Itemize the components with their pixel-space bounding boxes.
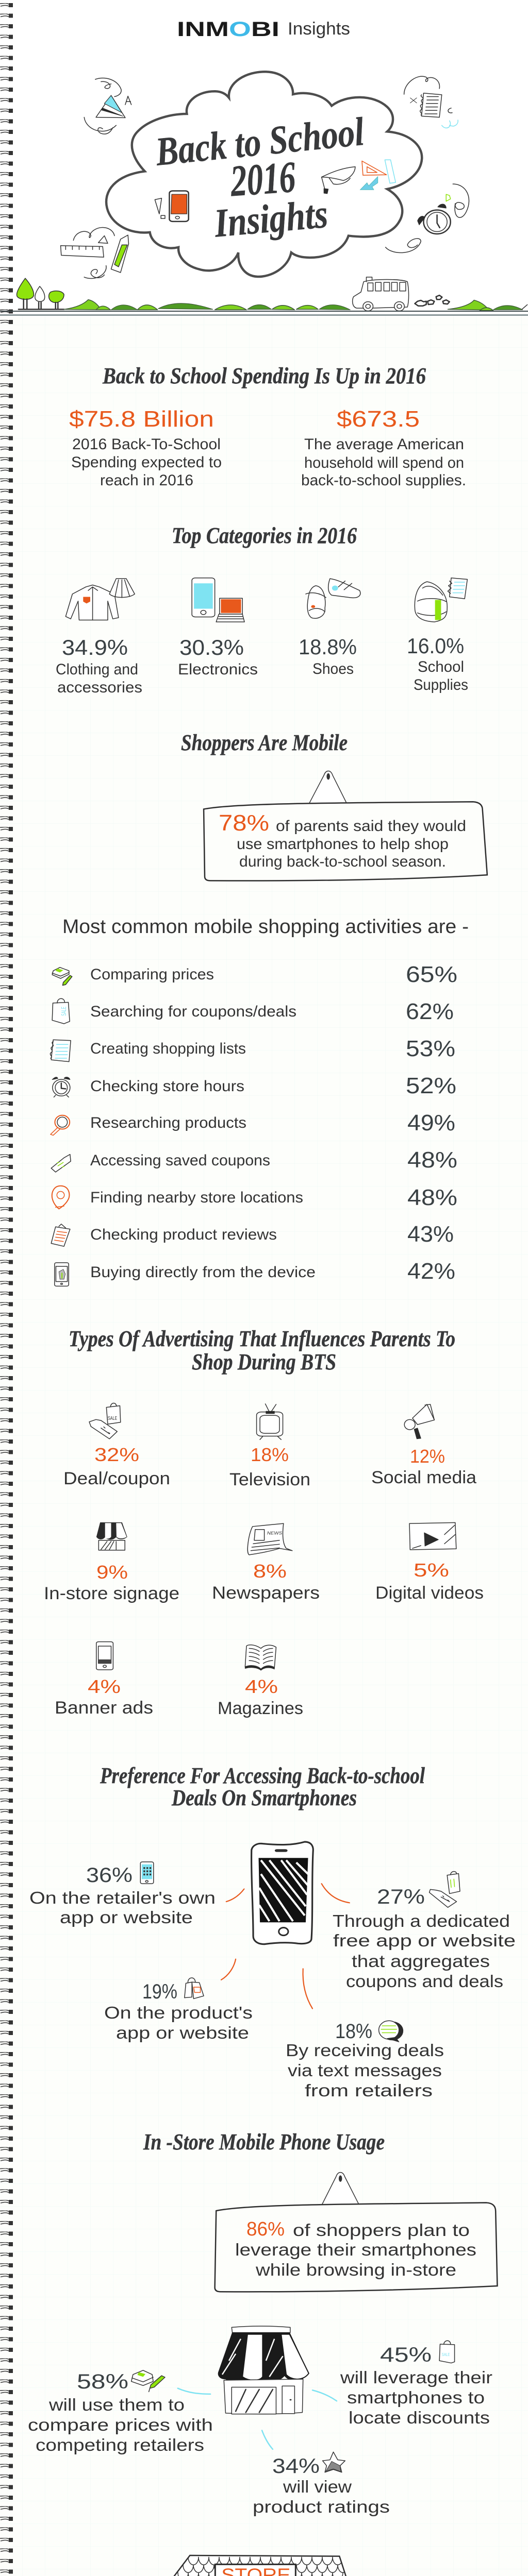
- ad item: digital videos: Digital videos: [375, 1583, 484, 1603]
- ad item: in-store signage: In-store signage: [44, 1584, 179, 1603]
- category labels: Supplies: [414, 676, 468, 693]
- stat: 58 percent: competing retailers: [36, 2435, 204, 2454]
- icon: notebook doodle: [404, 76, 458, 128]
- stat: 58 percent: compare prices with: [28, 2415, 213, 2434]
- ad item: deal coupon: 32%: [94, 1444, 139, 1465]
- icon: shoes: [306, 579, 360, 618]
- ad item: digital videos: [375, 1522, 484, 1603]
- ad item: newspapers: Newspapers: [212, 1583, 320, 1603]
- stat: 75.8 billion: reach in 2016: [100, 472, 193, 489]
- row: saved coupons: [51, 1147, 457, 1173]
- ad item: magazines: [218, 1645, 303, 1718]
- callout: 78 percent: 78%: [219, 810, 269, 836]
- stat: 45 percent: smartphones to: [347, 2388, 485, 2407]
- title: [153, 109, 366, 246]
- ad item: social media: [371, 1404, 476, 1487]
- heading: [100, 1763, 425, 1810]
- bushes: [64, 300, 527, 311]
- ad item: in-store signage: 9%: [96, 1562, 128, 1583]
- section: advertising types: [44, 1326, 484, 1718]
- icon: paper plane: [84, 78, 131, 134]
- row: saved coupons: Accessing saved coupons: [90, 1152, 270, 1169]
- stat: 34 percent: product ratings: [253, 2497, 390, 2516]
- row: store locations: [52, 1185, 457, 1210]
- ad item: newspapers: NEWS: [267, 1531, 282, 1536]
- ad item: deal coupon: [63, 1403, 170, 1488]
- callout: 78 percent: of parents said they would: [276, 818, 466, 835]
- icon: large smartphone with arrows: [221, 1842, 350, 2009]
- row: buying directly: Buying directly from the device: [90, 1264, 316, 1281]
- roof: [171, 2555, 349, 2576]
- row: store hours: [52, 1073, 456, 1098]
- logo: InMobi Insights: Insights: [288, 19, 350, 39]
- category labels: Shoes: [312, 660, 354, 677]
- row: buying directly: 42%: [407, 1259, 455, 1284]
- stat: 36 percent: 36%: [86, 1864, 133, 1887]
- row: creating lists: 53%: [406, 1036, 455, 1061]
- row: creating lists: [50, 1036, 455, 1062]
- callout: 86 percent: [215, 2173, 497, 2292]
- logo: InMobi Insights: INM O BI: [177, 18, 279, 41]
- stat: 27 percent: [333, 1871, 516, 1991]
- row: product reviews: 43%: [407, 1222, 454, 1247]
- row: buying directly: [55, 1259, 455, 1286]
- stat: 75.8 billion: Spending expected to: [71, 454, 222, 471]
- ad item: television: 18%: [251, 1444, 289, 1465]
- subheading: Most common mobile shopping activities are -: [62, 916, 469, 938]
- ad item: newspapers: 8%: [253, 1561, 287, 1582]
- ground lines: [0, 311, 528, 312]
- row: comparing prices: Comparing prices: [90, 966, 214, 983]
- category values: 16.0%: [407, 634, 464, 658]
- section: preference for deals: [29, 1763, 516, 2100]
- stat: 45 percent: locate discounts: [349, 2408, 490, 2427]
- heading: Shoppers Are Mobile: [181, 730, 348, 755]
- stat: 75.8 billion: [69, 406, 222, 489]
- heading: Preference For Accessing Back-to-school: [100, 1763, 425, 1788]
- category labels: Clothing and: [56, 661, 138, 678]
- stat: 58 percent: [28, 2370, 213, 2454]
- icon: backpack and notebook: [415, 578, 467, 622]
- heading: Types Of Advertising That Influences Parents To: [69, 1326, 455, 1351]
- stat: 673.5: household will spend on: [304, 454, 464, 471]
- section: top categories: [56, 523, 468, 696]
- row: comparing prices: 65%: [406, 962, 457, 987]
- callout: 78 percent: use smartphones to help shop: [237, 836, 449, 853]
- row: store locations: 48%: [407, 1185, 457, 1210]
- section: shoppers are mobile: [50, 730, 487, 1286]
- title: Insights: [212, 191, 329, 246]
- row: researching products: 49%: [407, 1110, 455, 1136]
- row: saved coupons: 48%: [407, 1147, 457, 1173]
- category labels: School: [418, 658, 464, 675]
- callout: 86 percent: 86%: [246, 2218, 285, 2240]
- row: store locations: Finding nearby store locations: [90, 1189, 303, 1206]
- row: searching for coupons: 62%: [406, 999, 454, 1024]
- icon: set square and ruler: [360, 160, 395, 190]
- ad item: deal coupon: SALE: [108, 1415, 117, 1421]
- icon: graduation cap: [322, 167, 355, 194]
- stat: 58 percent: will use them to: [48, 2395, 185, 2414]
- row: product reviews: [51, 1222, 454, 1247]
- row: store hours: Checking store hours: [90, 1078, 244, 1095]
- stat: 75.8 billion: $75.8 Billion: [69, 406, 214, 432]
- title: Back to School: [153, 109, 366, 174]
- stat: 673.5: $673.5: [337, 406, 420, 432]
- row: searching for coupons: SALE: [60, 1007, 68, 1016]
- stat: 27 percent: coupons and deals: [346, 1972, 503, 1991]
- spiral binding: [0, 0, 13, 2576]
- category icons: [65, 578, 467, 622]
- stat: 19 percent: [104, 1978, 253, 2042]
- ad item: social media: Social media: [371, 1468, 476, 1487]
- header cloud with title: [106, 72, 422, 277]
- stat: 673.5: The average American: [304, 436, 464, 453]
- stat: 27 percent: free app or website: [333, 1931, 516, 1950]
- heading: Top Categories in 2016: [172, 523, 357, 548]
- ad item: deal coupon: Deal/coupon: [63, 1469, 170, 1488]
- stat: 75.8 billion: 2016 Back-To-School: [72, 436, 221, 453]
- callout: 86 percent: leverage their smartphones: [235, 2240, 476, 2259]
- icon: shirt and skirt: [65, 579, 135, 620]
- stat: 673.5: [301, 406, 466, 489]
- stat: 19 percent: app or website: [116, 2023, 249, 2042]
- heading: Shop During BTS: [192, 1349, 336, 1375]
- heading: [69, 1326, 455, 1375]
- logo: InMobi Insights: [177, 18, 350, 41]
- category labels: accessories: [57, 679, 142, 696]
- category labels: Electronics: [178, 661, 258, 678]
- row: searching for coupons: Searching for coupons/deals: [90, 1003, 296, 1020]
- ad item: television: Television: [229, 1470, 310, 1489]
- stat: 34 percent: 34%: [272, 2455, 320, 2478]
- icon: smartphone: [155, 191, 189, 222]
- list: mobile activities: [50, 962, 457, 1286]
- stat: 18 percent: via text messages: [288, 2061, 442, 2080]
- stat: 18 percent: from retailers: [305, 2081, 433, 2100]
- stat: 36 percent: [29, 1862, 216, 1927]
- stat: 18 percent: [286, 2020, 444, 2100]
- row: researching products: [51, 1110, 455, 1136]
- ad item: banner ads: [55, 1642, 153, 1718]
- category labels: [56, 658, 468, 696]
- ad item: banner ads: 4%: [88, 1676, 121, 1697]
- stat: 27 percent: Through a dedicated: [333, 1911, 510, 1930]
- callout: 78 percent: [204, 771, 487, 881]
- stat: 45 percent: will leverage their: [340, 2368, 492, 2387]
- icon: trees: [17, 278, 64, 309]
- heading: In -Store Mobile Phone Usage: [143, 2129, 385, 2155]
- category values: 30.3%: [179, 635, 244, 659]
- stat: 45 percent: 45%: [380, 2344, 432, 2366]
- title: 2016: [228, 152, 297, 206]
- icon: phone and laptop: [192, 578, 244, 622]
- category values: 34.9%: [62, 635, 128, 659]
- stat: 34 percent: will view: [283, 2477, 352, 2496]
- row: comparing prices: [52, 962, 457, 987]
- stat: 18 percent: 18%: [335, 2020, 372, 2043]
- store building: [171, 2555, 349, 2576]
- row: creating lists: Creating shopping lists: [90, 1040, 246, 1057]
- header doodles: [17, 76, 527, 311]
- ad item: television: [229, 1404, 310, 1489]
- stat: 27 percent: that aggregates: [352, 1952, 490, 1971]
- row: searching for coupons: [52, 998, 454, 1024]
- icon: school bus: [353, 277, 450, 311]
- stat: 45 percent: SALE: [442, 2353, 450, 2358]
- stat: 58 percent: 58%: [77, 2370, 128, 2393]
- ad item: magazines: Magazines: [218, 1699, 303, 1718]
- callout: 86 percent: while browsing in-store: [255, 2260, 456, 2279]
- row: store hours: 52%: [406, 1073, 456, 1098]
- row: product reviews: Checking product reviews: [90, 1226, 277, 1243]
- stat: 18 percent: By receiving deals: [286, 2041, 444, 2060]
- section: in-store mobile usage: [28, 2129, 497, 2516]
- stat: 673.5: back-to-school supplies.: [301, 472, 466, 489]
- ad item: banner ads: Banner ads: [55, 1698, 153, 1718]
- category values: 18.8%: [299, 635, 357, 659]
- stat: 19 percent: 19%: [142, 1980, 177, 2003]
- callout: 78 percent: during back-to-school season.: [239, 853, 446, 870]
- ad item: magazines: 4%: [245, 1676, 278, 1697]
- callout: 86 percent: of shoppers plan to: [293, 2221, 470, 2240]
- ad item: digital videos: 5%: [414, 1560, 449, 1581]
- ad item: social media: 12%: [410, 1446, 445, 1467]
- icon: large storefront with arrows: [178, 2326, 337, 2449]
- stat: 19 percent: On the product's: [104, 2003, 253, 2022]
- heading: Back to School Spending Is Up in 2016: [102, 363, 426, 388]
- ad item: newspapers: [212, 1523, 320, 1603]
- stat: 34 percent: [253, 2452, 390, 2516]
- row: researching products: Researching products: [90, 1114, 246, 1131]
- icon: alarm clock: [386, 184, 469, 252]
- heading: Deals On Smartphones: [171, 1785, 357, 1810]
- icon: ruler and pencil: [61, 227, 128, 279]
- stat: 27 percent: 27%: [377, 1886, 425, 1908]
- section: spending: [69, 363, 466, 489]
- stat: 45 percent: [340, 2341, 492, 2427]
- stat: 36 percent: On the retailer's own: [29, 1888, 216, 1907]
- ad item: in-store signage: [44, 1522, 179, 1603]
- category values: [62, 634, 464, 659]
- stat: 36 percent: app or website: [60, 1908, 193, 1927]
